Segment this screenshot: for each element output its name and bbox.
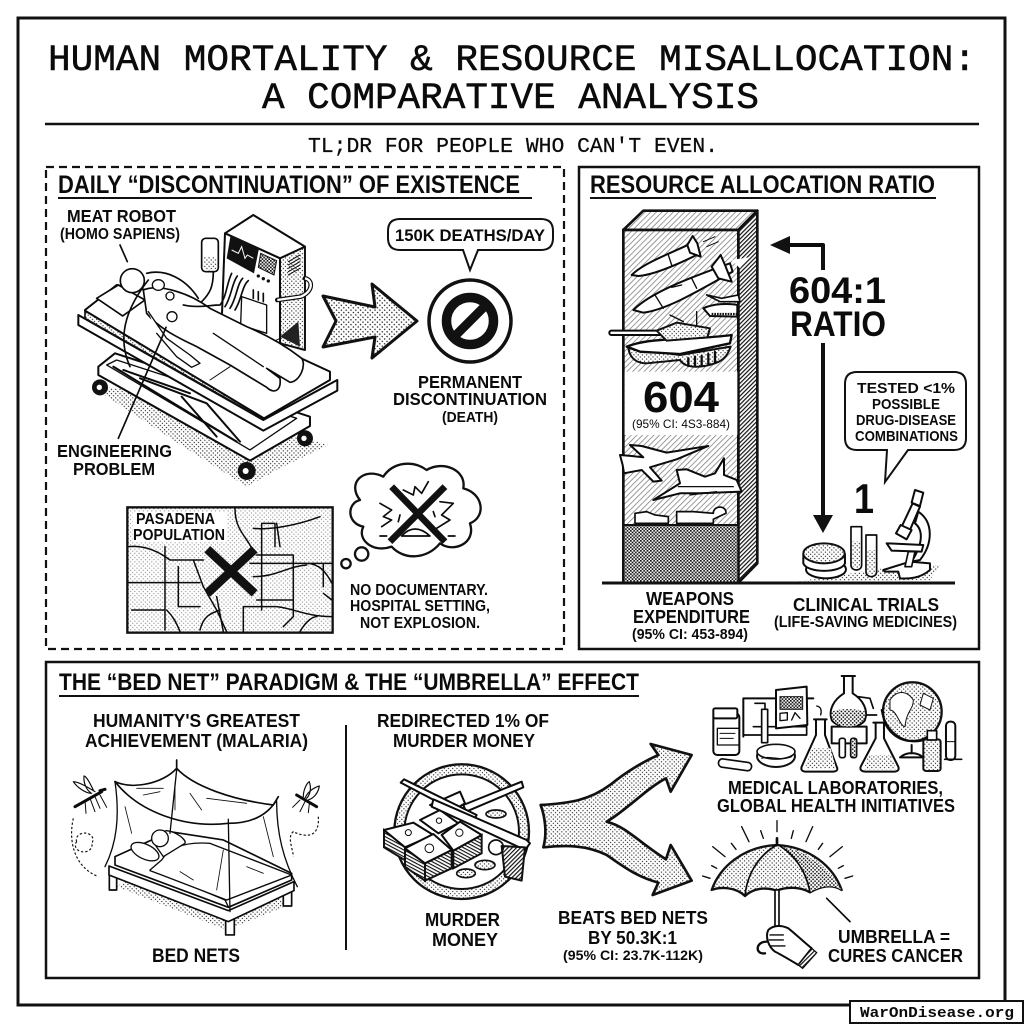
bed frame [92,353,313,480]
wires [124,272,248,367]
label: beats bed nets [558,908,708,963]
title: A COMPARATIVE ANALYSIS [262,78,759,120]
heading: daily discontinuation: DAILY “DISCONTINUATION” OF EXISTENCE [58,171,520,199]
callout: tested under 1%: COMBINATIONS [855,428,958,445]
label: weapons expenditure [632,589,750,643]
label: Pasadena population: POPULATION [133,527,225,544]
label: bed nets: BED NETS [152,946,240,967]
callout: tested under 1%: DRUG-DISEASE [856,412,956,429]
patient body [120,269,303,391]
label: beats bed nets: BY 50.3K:1 [588,928,677,948]
jet 2 [653,458,742,500]
label: beats bed nets: (95% CI: 23.7K-112K) [563,947,703,963]
callout: tested under 1% [845,372,966,482]
label: medical laboratories: GLOBAL HEALTH INITIATIVES [717,796,955,816]
illustration: umbrella with hand [703,821,853,968]
heading: bed net paradigm: THE “BED NET” PARADIGM & THE “UMBRELLA” EFFECT [59,669,639,696]
label: permanent discontinuation [393,372,547,426]
heading: resource allocation: RESOURCE ALLOCATION RATIO [590,171,935,199]
callout: 150K deaths per day [388,219,553,270]
label: permanent discontinuation: PERMANENT [418,372,522,392]
lab machine [743,687,821,743]
watermark: WarOnDisease.org [860,1006,1014,1022]
label: weapons expenditure: WEAPONS [646,589,734,609]
label: clinical trials: (LIFE-SAVING MEDICINES) [774,614,957,631]
IV bag [202,238,218,302]
label: clinical trials [774,594,957,631]
label: murder money: MONEY [432,930,498,950]
label: 604:1 ratio: RATIO [790,305,886,344]
tank [609,312,732,367]
bed [109,830,294,935]
watermark [850,1001,1023,1023]
label: permanent discontinuation: DISCONTINUATION [393,389,547,409]
label: meat robot: (HOMO SAPIENS) [60,226,180,243]
arrow: ratio up [770,236,823,270]
net [105,760,297,912]
illustration: murder money prohibited [384,764,530,899]
label: redirected 1%: REDIRECTED 1% OF [377,711,549,731]
round flask on stand [831,676,877,758]
icon: prohibition sign [429,280,511,362]
rifle [430,782,523,812]
callout: tested under 1%: TESTED <1% [857,380,955,397]
missile 2 [633,255,748,313]
value: 604 [632,373,730,431]
pistol and barrel [401,779,530,881]
pill and petri dish [718,744,795,771]
monitor cart [222,215,311,350]
arrow: ratio down [813,343,833,533]
label: redirected 1% [377,711,549,751]
label: murder money: MURDER [425,910,500,930]
missile 1 [632,236,718,276]
petri dishes [803,543,846,578]
panel: resource allocation ratio [579,167,979,649]
leader lines [118,245,166,438]
value: 604: (95% CI: 4S3-884) [632,417,730,431]
medicine vial and tube [923,722,962,771]
globe [882,682,942,757]
caption: no documentary: NOT EXPLOSION. [360,615,480,632]
illustration: patient on hospital bed with monitor [78,215,337,487]
small tank [703,295,740,317]
caption: no documentary: NO DOCUMENTARY. [350,582,488,599]
label: meat robot [60,206,180,243]
value: 604: 604 [643,373,720,422]
label: Pasadena population [133,511,225,544]
label: Pasadena population: PASADENA [136,511,215,528]
mattress [78,285,337,431]
money stacks [384,810,482,881]
shaft and hand [758,890,817,968]
label: permanent discontinuation: (DEATH) [442,409,498,426]
label: engineering problem: ENGINEERING [57,441,172,461]
munitions [635,507,726,523]
flask large [860,723,899,772]
label: 604:1 ratio: 604:1 [789,270,886,311]
jet 1 [620,445,708,482]
rays [703,821,853,878]
callout: 150K deaths per day: 150K DEATHS/DAY [395,227,545,245]
icons: trial lab equipment [797,490,940,582]
callout: tested under 1%: POSSIBLE [872,396,940,413]
caption: no documentary: HOSPITAL SETTING, [350,598,490,615]
caption: no documentary [350,582,490,632]
label: weapons expenditure: EXPENDITURE [633,607,750,627]
label: umbrella cures cancer: UMBRELLA = [838,926,950,947]
label: weapons expenditure: (95% CI: 453-894) [632,627,748,643]
microscope [883,490,930,579]
coins [457,810,506,878]
label: clinical trials: CLINICAL TRIALS [793,594,939,615]
label: redirected 1%: MURDER MONEY [393,731,535,751]
title [48,40,976,120]
label: humanity's greatest achievement: HUMANITY'S GREATEST [93,710,301,731]
canopy [712,845,842,896]
label: umbrella cures cancer: CURES CANCER [828,945,963,966]
label: beats bed nets: BEATS BED NETS [558,908,708,928]
panel: bed net paradigm [46,662,979,978]
label: 604:1 ratio [789,270,886,344]
test tubes [851,527,877,577]
label: murder money [425,910,500,950]
title: HUMAN MORTALITY & RESOURCE MISALLOCATION: [48,40,976,82]
mosquito right [290,782,319,857]
arrow: to death [323,284,417,358]
weapons tower [609,211,757,583]
panel: daily discontinuation [46,167,564,649]
label: meat robot: MEAT ROBOT [67,206,176,226]
pill bottle [713,708,739,755]
illustration: medical laboratories [713,676,962,772]
label: humanity's greatest achievement [85,710,308,751]
map: Pasadena [127,507,333,633]
label: engineering problem [57,441,172,479]
arrow: forked arrow [541,744,692,895]
value: 1: 1 [854,475,874,522]
mosquito left [72,776,107,877]
label: humanity's greatest achievement: ACHIEVEMENT (MALARIA) [85,730,308,751]
label: umbrella cures cancer [828,926,963,966]
label: engineering problem: PROBLEM [73,459,155,479]
label: medical laboratories: MEDICAL LABORATORIES, [728,778,943,798]
flask small [801,719,837,772]
thought bubble: no explosion [341,464,481,568]
label: medical laboratories [717,778,955,816]
subtitle: TL;DR FOR PEOPLE WHO CAN'T EVEN. [308,136,718,159]
illustration: bed net with mosquitoes [72,760,319,935]
